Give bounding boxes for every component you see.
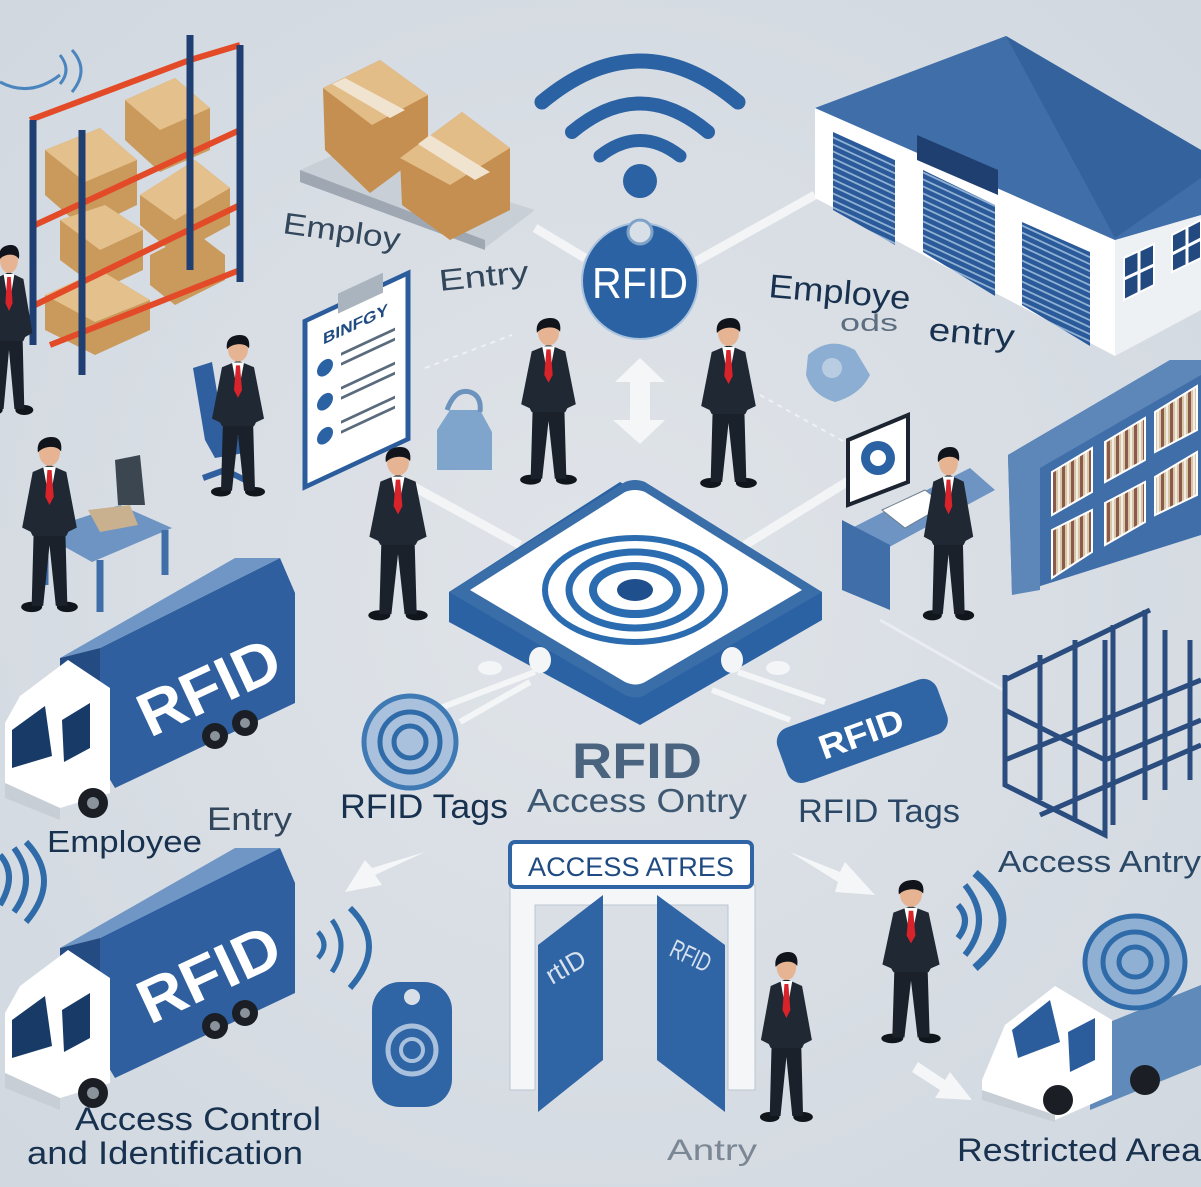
label: Entry lower: Entry	[207, 801, 292, 837]
RFID key tag: RFID	[592, 259, 688, 308]
central RFID reader	[449, 480, 822, 725]
left desk with employee	[21, 437, 172, 612]
icon: double arrow	[613, 358, 665, 444]
access gate: rtID	[540, 943, 591, 990]
truck: top	[5, 558, 295, 820]
label: ods: ods	[840, 310, 898, 337]
radio waves left edge	[0, 842, 44, 922]
metal rack right	[1005, 610, 1201, 835]
person: bottom right	[881, 880, 941, 1043]
arrow: to left	[345, 852, 425, 892]
truck: bottom	[5, 848, 295, 1110]
radio waves top left	[0, 50, 81, 92]
RFID key tag	[582, 220, 698, 339]
arrow: lower right	[912, 1062, 972, 1100]
person: left shelf worker	[0, 245, 33, 415]
label: Access Control and Identification: and Identification	[27, 1135, 303, 1171]
label: RFID Tags right: RFID Tags	[798, 793, 960, 829]
truck: bottom: RFID	[127, 912, 292, 1038]
label: entry: entry	[927, 311, 1016, 354]
radio waves middle left	[318, 908, 369, 988]
right desk with computer	[842, 415, 995, 620]
icon: wifi signal	[542, 61, 738, 198]
delivery truck small	[982, 916, 1201, 1122]
seated person	[193, 335, 265, 496]
label: Antry: Antry	[667, 1134, 757, 1167]
RFID tag round	[364, 696, 456, 788]
label: Employe: Employe	[767, 267, 912, 316]
label: Employ: Employ	[281, 207, 402, 256]
person: right talking	[700, 318, 757, 488]
clipboard	[305, 261, 408, 487]
access gate: RFID	[665, 933, 716, 978]
access gate	[510, 842, 755, 1112]
RFID tag card	[773, 675, 952, 787]
blue bag icon	[437, 391, 492, 470]
label: Employee: Employee	[47, 824, 202, 859]
label: Access Control and Identification: Access Control	[75, 1101, 321, 1137]
connector lines	[405, 195, 1003, 690]
clipboard: BINFGY	[323, 300, 388, 348]
key fob	[372, 982, 452, 1107]
arrow: to right	[790, 852, 875, 895]
shelf with boxes	[30, 35, 240, 375]
label: Access Ontry: Access Ontry	[527, 782, 748, 819]
blue sensor icon	[806, 344, 870, 402]
RFID tag card: RFID	[814, 702, 909, 767]
access gate: ACCESS ATRES	[528, 852, 734, 882]
label: RFID Tags left: RFID Tags	[340, 788, 508, 826]
label: Entry: Entry	[437, 256, 530, 298]
pallet of boxes	[300, 60, 535, 250]
radio waves bottom right	[958, 873, 1002, 968]
label: Access Antry: Access Antry	[998, 844, 1201, 879]
person: centre left	[368, 447, 428, 620]
person: at gate	[760, 952, 813, 1122]
reader cables	[440, 672, 825, 722]
warehouse building	[815, 36, 1201, 356]
heading: RFID: RFID	[572, 733, 702, 789]
label: Access Control and Identification	[27, 1101, 321, 1171]
person: left talking	[520, 318, 577, 485]
label: Restricted Area: Restricted Area	[957, 1132, 1201, 1168]
truck: top: RFID	[127, 625, 292, 751]
bookshelf	[1008, 360, 1201, 595]
